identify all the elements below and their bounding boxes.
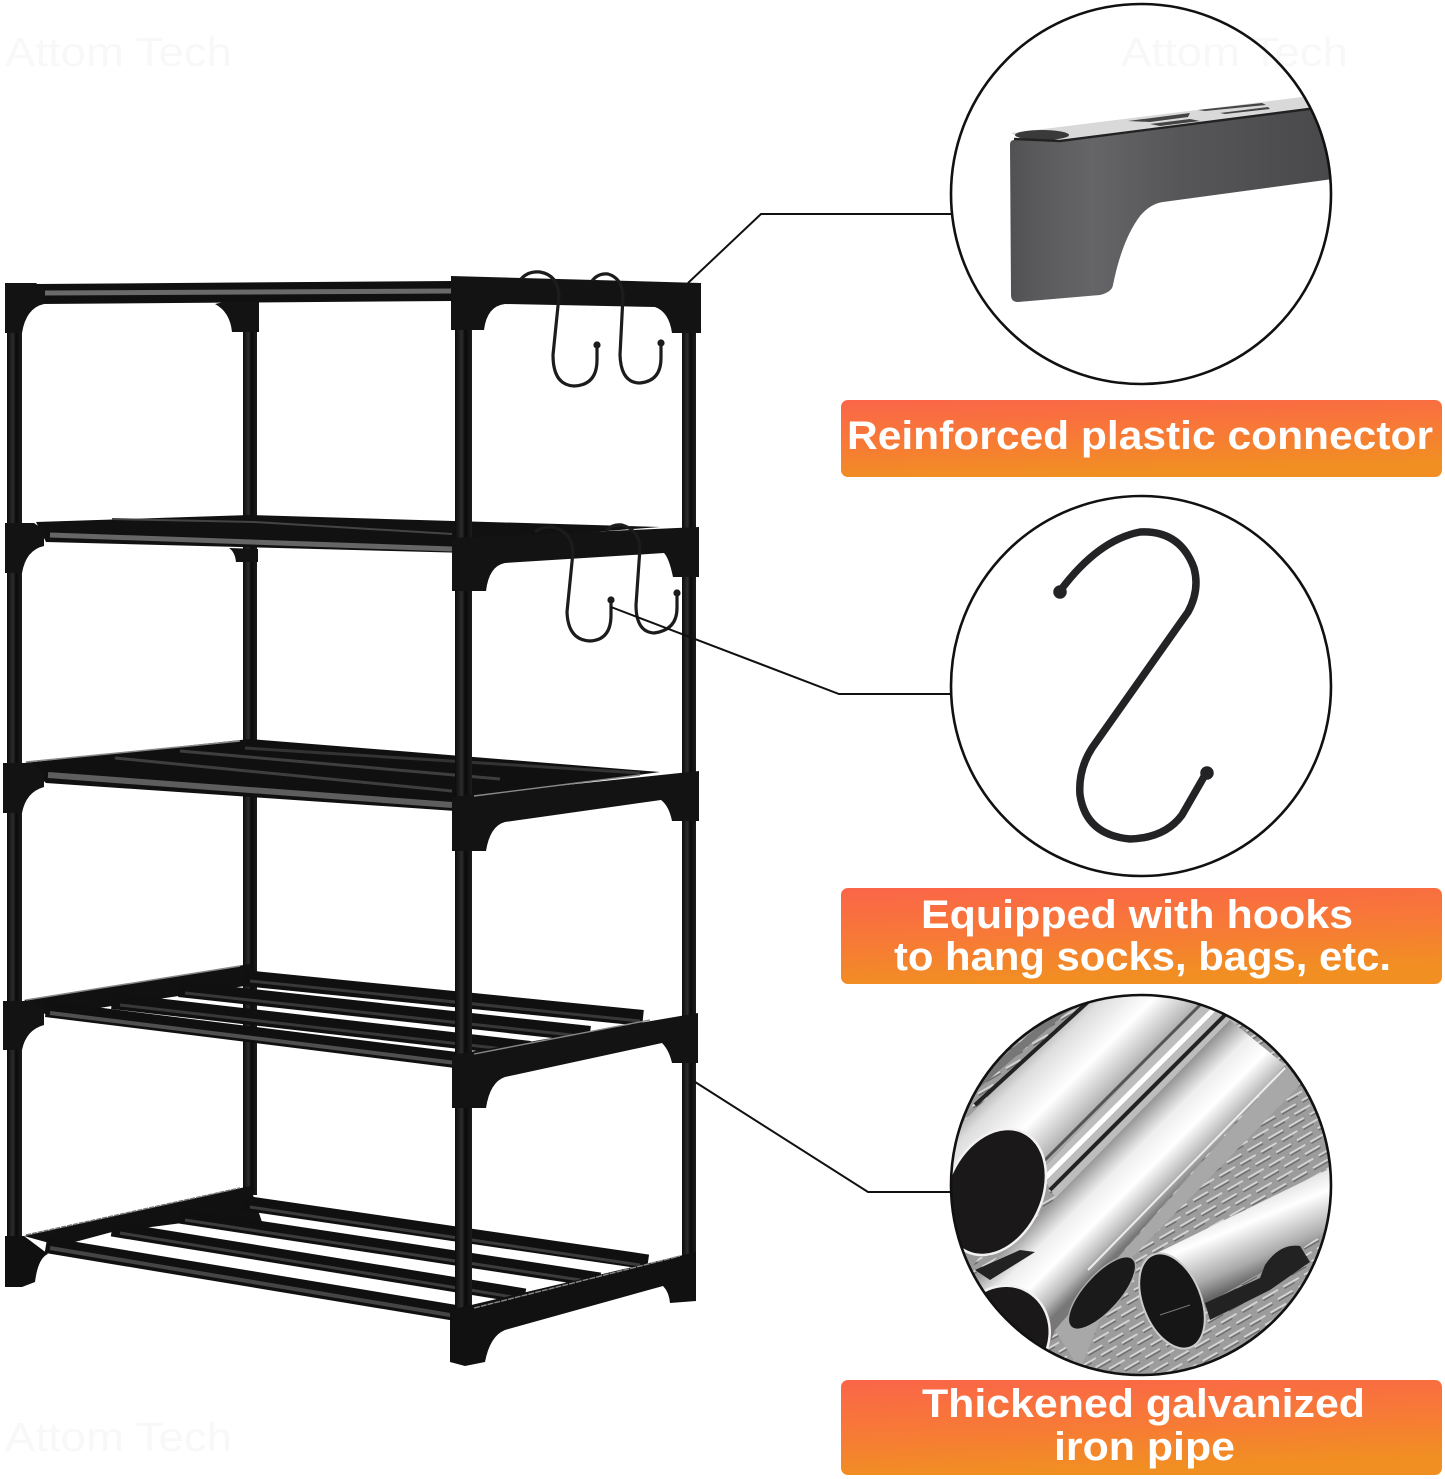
slanted pipe	[1055, 1065, 1300, 1370]
bottom front connector	[450, 1252, 696, 1366]
label: thickened galvanized iron pipe: Thickened galvanized	[922, 1382, 1365, 1426]
label: equipped with hooks	[841, 888, 1442, 984]
callout line: pipe	[692, 1080, 951, 1192]
hooks on the top shelf	[521, 272, 663, 386]
fourth front connector	[452, 1013, 698, 1108]
callout line: hook	[611, 607, 951, 694]
rear middle leg	[243, 325, 257, 1195]
circle: plastic connector detail	[951, 4, 1348, 384]
shelf edge highlights	[474, 775, 680, 1308]
lower left hole	[984, 1286, 1051, 1350]
front leg	[455, 325, 472, 1315]
watermarks: Attom Tech	[5, 1414, 232, 1460]
top shelf rails and left connectors	[5, 281, 452, 333]
top front connector	[451, 276, 701, 333]
circle: S hook detail	[951, 496, 1331, 876]
big middle pipe	[975, 1020, 1285, 1370]
callout line: connector	[688, 214, 951, 283]
fourth shelf rails and left connectors	[3, 964, 643, 1063]
thin stripes pipe	[1046, 1006, 1238, 1198]
watermarks: Attom Tech	[5, 29, 232, 75]
label: thickened galvanized iron pipe	[841, 1380, 1442, 1475]
small hole	[1068, 1257, 1136, 1329]
watermarks	[5, 29, 232, 1460]
icon: S hook	[1057, 532, 1210, 839]
shoe rack product	[3, 272, 701, 1366]
lower right pipe	[1155, 1166, 1335, 1308]
second shelf rails and left connectors	[5, 515, 660, 573]
circle: plastic connector detail: Attom Tech	[1121, 29, 1348, 75]
right leg	[682, 330, 696, 1260]
left rear leg	[7, 330, 22, 1250]
hooks on the second shelf	[535, 525, 679, 641]
label: thickened galvanized iron pipe: iron pipe	[1054, 1425, 1235, 1469]
second front connector	[452, 527, 699, 591]
third front connector	[452, 771, 699, 851]
bottom shelf rails and left foot	[5, 1186, 648, 1316]
label: equipped with hooks: Equipped with hooks	[921, 893, 1353, 937]
label: equipped with hooks: to hang socks, bags, etc.	[894, 935, 1391, 979]
pipe top left	[950, 985, 1205, 1270]
third shelf rails and left connectors	[3, 739, 660, 813]
label: reinforced plastic connector	[841, 400, 1442, 477]
circle: galvanized iron pipe detail	[950, 994, 1332, 1376]
upper left hole	[952, 1129, 1047, 1256]
label: reinforced plastic connector: Reinforced plastic connector	[847, 414, 1433, 458]
